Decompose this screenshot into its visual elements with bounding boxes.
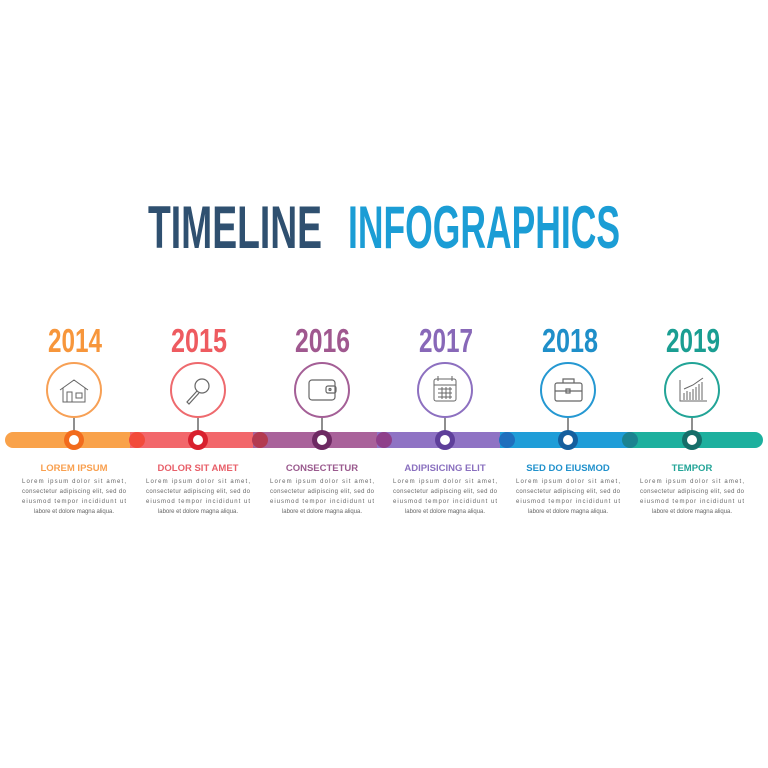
item 2018: SED DO EIUSMOD (526, 463, 610, 474)
item 2017: ADIPISICING ELIT (404, 463, 486, 474)
item 2019: labore et dolore magna aliqua. (652, 509, 732, 515)
icon: wallet (309, 380, 336, 400)
item 2016: Lorem ipsum dolor sit amet, (270, 479, 374, 485)
item 2017: eiusmod tempor incididunt ut (393, 499, 497, 505)
item 2014: Lorem ipsum dolor sit amet, (22, 479, 126, 485)
item 2018: consectetur adipiscing elit, sed do (516, 489, 621, 495)
item 2015: DOLOR SIT AMET (158, 463, 239, 474)
item 2015: 2015 (171, 322, 227, 359)
item 2016: labore et dolore magna aliqua. (282, 509, 362, 515)
icon: briefcase (555, 379, 582, 401)
item 2019: TEMPOR (672, 463, 712, 474)
item 2015: eiusmod tempor incididunt ut (146, 499, 250, 505)
item 2016 (270, 322, 375, 515)
item 2015: consectetur adipiscing elit, sed do (146, 489, 251, 495)
icon: magnifier (187, 379, 209, 404)
title: TIMELINE (148, 194, 322, 261)
item 2016: CONSECTETUR (286, 463, 358, 474)
item 2014: labore et dolore magna aliqua. (34, 509, 114, 515)
icon: bar chart (680, 378, 707, 401)
item 2015: Lorem ipsum dolor sit amet, (146, 479, 250, 485)
item 2017: labore et dolore magna aliqua. (405, 509, 485, 515)
timeline bar (5, 432, 763, 448)
item 2016: eiusmod tempor incididunt ut (270, 499, 374, 505)
item 2014: consectetur adipiscing elit, sed do (22, 489, 127, 495)
icon: house (60, 380, 88, 402)
item 2019: Lorem ipsum dolor sit amet, (640, 479, 744, 485)
item 2016: 2016 (295, 322, 350, 359)
item 2014: eiusmod tempor incididunt ut (22, 499, 126, 505)
item 2018: eiusmod tempor incididunt ut (516, 499, 620, 505)
title (148, 194, 620, 261)
item 2016: consectetur adipiscing elit, sed do (270, 489, 375, 495)
item 2018: 2018 (542, 322, 598, 359)
item 2018 (516, 322, 621, 515)
item 2017: consectetur adipiscing elit, sed do (393, 489, 498, 495)
item 2019: consectetur adipiscing elit, sed do (640, 489, 745, 495)
item 2018: labore et dolore magna aliqua. (528, 509, 608, 515)
item 2015: labore et dolore magna aliqua. (158, 509, 238, 515)
item 2019 (640, 322, 745, 515)
item 2019: eiusmod tempor incididunt ut (640, 499, 744, 505)
item 2017 (393, 322, 498, 515)
item 2014: LOREM IPSUM (40, 463, 108, 474)
item 2018: Lorem ipsum dolor sit amet, (516, 479, 620, 485)
icon: calendar (434, 376, 456, 401)
item 2017: Lorem ipsum dolor sit amet, (393, 479, 497, 485)
item 2015 (146, 322, 251, 515)
item 2019: 2019 (666, 322, 720, 359)
item 2017: 2017 (419, 322, 473, 359)
item 2014: 2014 (48, 322, 102, 359)
item 2014 (22, 322, 127, 515)
